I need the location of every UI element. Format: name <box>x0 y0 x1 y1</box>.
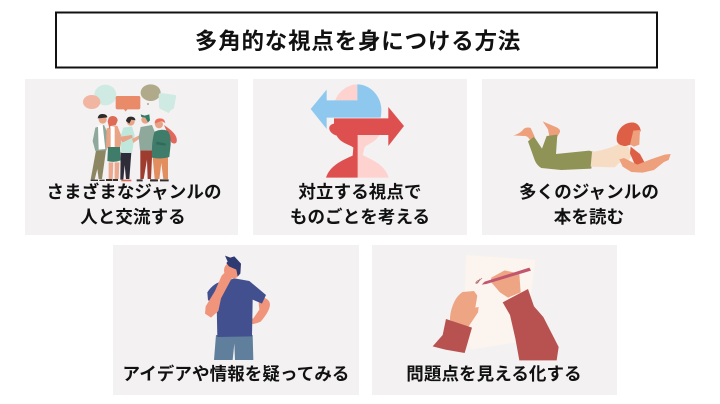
label: 対立する視点で <box>298 182 422 202</box>
label line 2: 本を読む <box>554 207 624 227</box>
label line 2: ものごとを考える <box>290 207 430 227</box>
icon: thinking man <box>205 256 270 360</box>
icon: head with opposing arrows <box>311 84 404 178</box>
person 2 <box>106 116 122 181</box>
title <box>56 12 657 68</box>
icon: woman reading lying down <box>513 121 671 173</box>
label: さまざまなジャンルの <box>46 182 222 202</box>
person 4 <box>137 114 157 181</box>
icon: group talking <box>83 84 177 181</box>
label: 問題点を見える化する <box>406 364 582 384</box>
panel: read many genres <box>482 79 695 235</box>
panel: opposing viewpoints <box>253 79 467 235</box>
label line 2: 人と交流する <box>80 207 186 227</box>
panel: people of various genres <box>25 79 238 235</box>
person 3 <box>118 117 143 181</box>
label: アイデアや情報を疑ってみる <box>122 364 350 384</box>
label: 多くのジャンルの <box>519 182 659 202</box>
person 1 <box>91 114 107 181</box>
icon: hands writing on paper <box>433 255 559 360</box>
title: 多角的な視点を身につける方法 <box>195 29 521 54</box>
panel: doubt ideas and information <box>113 245 359 395</box>
person 5 <box>151 118 177 181</box>
panel: visualize the problem <box>372 245 617 395</box>
